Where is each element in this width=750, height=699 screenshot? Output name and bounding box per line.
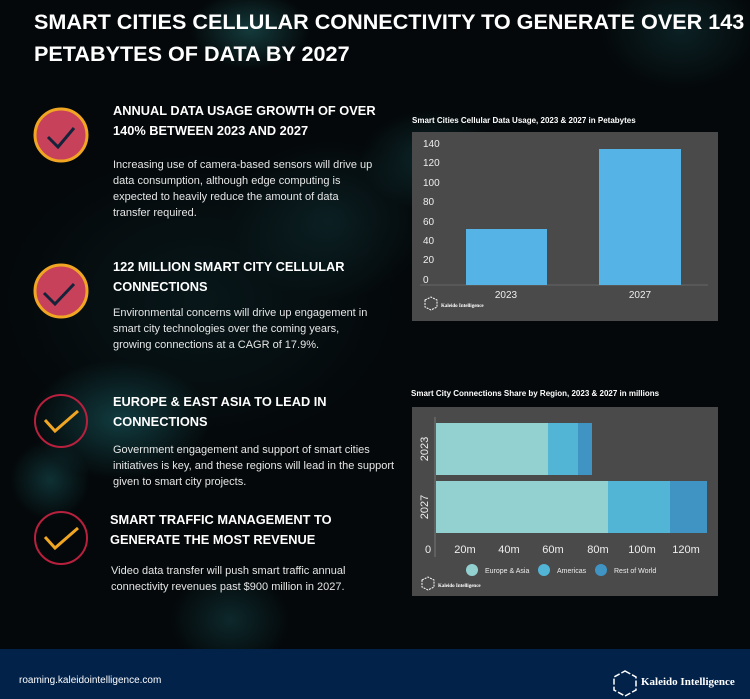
text 3: initiatives is key, and these regions will lead in the support given to smart city projects. [113, 460, 394, 488]
icon: check 1 [34, 108, 88, 162]
icon: check 3 [34, 394, 88, 448]
bar chart: data usage: 140 [423, 139, 440, 150]
stacked bar chart: connections by region: 120m [672, 544, 700, 556]
footer url: roaming.kaleidointelligence.com [19, 675, 161, 686]
stacked bar chart: connections by region: 2027 [419, 495, 431, 519]
heading 1: ANNUAL DATA USAGE GROWTH OF OVER 140% BETWEEN 2023 AND 2027 [113, 103, 376, 138]
stacked bar chart: connections by region: Kaleido Intelligence [438, 584, 481, 589]
bar chart: data usage: 2023 [495, 290, 518, 301]
title: SMART CITIES CELLULAR CONNECTIVITY TO GENERATE OVER 143 PETABYTES OF DATA BY 2027 [34, 9, 744, 66]
stacked bar chart: connections by region: Rest of World [614, 568, 656, 575]
stacked bar chart: connections by region: 20m [454, 544, 476, 556]
heading 3: EUROPE & EAST ASIA TO LEAD IN CONNECTIONS [113, 394, 327, 429]
bar chart: data usage: 0 [423, 275, 429, 286]
footer [0, 649, 750, 699]
footer logo [613, 670, 735, 697]
text 1: Increasing use of camera-based sensors will drive up data consumption, although edge computing is expected to heavily reduce the amount of data transfer required. [113, 159, 372, 219]
text 4: Video data transfer will push smart traffic annual connectivity revenues past $900 million in 2027. [111, 565, 345, 593]
text 3: Government engagement and support of smart cities [113, 444, 370, 456]
bar chart: data usage: 60 [423, 217, 435, 228]
stacked bar chart: connections by region: 60m [542, 544, 564, 556]
stacked bar chart: connections by region [412, 407, 718, 596]
stacked bar chart: connections by region: Americas [557, 568, 587, 575]
chart 1 title: Smart Cities Cellular Data Usage, 2023 & 2027 in Petabytes [412, 116, 636, 125]
stacked bar chart: connections by region: 100m [628, 544, 656, 556]
bar chart: data usage: Kaleido Intelligence [441, 304, 484, 309]
icon: check 2 [34, 264, 88, 318]
bar chart: data usage: 20 [423, 255, 435, 266]
bar chart: data usage [412, 132, 718, 321]
bar chart: data usage: 120 [423, 158, 440, 169]
stacked bar chart: connections by region: 80m [587, 544, 609, 556]
bar chart: data usage: 80 [423, 197, 435, 208]
stacked bar chart: connections by region: 2023 [419, 437, 431, 461]
chart 2 title: Smart City Connections Share by Region, 2023 & 2027 in millions [411, 389, 659, 398]
icon: check 4 [34, 511, 88, 565]
text 3 [113, 444, 394, 488]
stacked bar chart: connections by region: 40m [498, 544, 520, 556]
text 2: Environmental concerns will drive up engagement in smart city technologies over the coming years, growing connections at a CAGR of 17.9%. [113, 307, 367, 351]
heading 2: 122 MILLION SMART CITY CELLULAR CONNECTIONS [113, 259, 345, 294]
heading 4: SMART TRAFFIC MANAGEMENT TO GENERATE THE MOST REVENUE [110, 512, 332, 547]
bar chart: data usage: 40 [423, 236, 435, 247]
stacked bar chart: connections by region: Europe & Asia [485, 568, 529, 575]
bar chart: data usage: 2027 [629, 290, 652, 301]
stacked bar chart: connections by region: 0 [425, 544, 431, 556]
bar chart: data usage: 100 [423, 178, 440, 189]
footer logo: Kaleido Intelligence [641, 676, 735, 688]
